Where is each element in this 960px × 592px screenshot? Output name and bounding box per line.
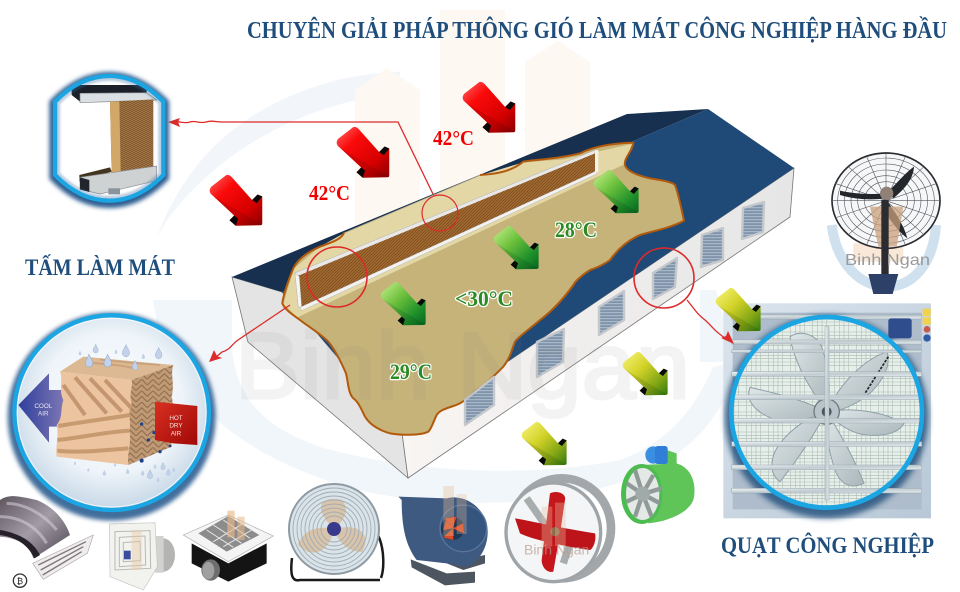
- louvered wall vents: [465, 202, 764, 425]
- pad airflow circle diagram: [8, 313, 216, 521]
- product: centrifugal blower: [398, 486, 488, 585]
- product: ceiling exhaust fan: [109, 523, 175, 590]
- yellow exhaust arrows: [522, 352, 668, 465]
- large industrial exhaust fan: [723, 303, 931, 518]
- product: floor fan: [289, 484, 383, 580]
- hot air block: DRY: [169, 423, 183, 430]
- hot air block: [155, 402, 197, 445]
- porthole: cooling pad on rail: [55, 73, 163, 203]
- left gable wall: [232, 277, 408, 478]
- cooling pad strip: [296, 153, 595, 307]
- inside temperature labels: [390, 217, 597, 384]
- yellow arrow on fan: [716, 288, 761, 331]
- roof back slope: [232, 109, 708, 292]
- hot air block: HOT: [169, 415, 183, 422]
- white top rail: [294, 150, 595, 277]
- corrugated pad block: [56, 357, 173, 465]
- product: flexible duct diffuser: ₿: [17, 576, 23, 586]
- water droplets: [74, 344, 175, 482]
- inside temperature labels: <30°C: [455, 286, 513, 311]
- product: flexible duct diffuser: [0, 496, 93, 587]
- wall mounted fan: [832, 153, 940, 294]
- outside temperature labels: 42°C: [433, 126, 474, 150]
- cutaway interior: [282, 143, 684, 435]
- label: industrial fan: QUẠT CÔNG NGHIỆP: [721, 532, 934, 558]
- hot air block: AIR: [171, 430, 182, 437]
- outside temperature labels: [309, 126, 474, 205]
- building: [232, 109, 794, 478]
- product: red axial fan: Binh Ngan: [524, 541, 589, 557]
- blob outline: [282, 143, 684, 435]
- cool air arrow: [18, 373, 65, 443]
- louver bars: [732, 315, 922, 500]
- interior floor blob: [282, 143, 684, 435]
- label: cooling pad: TẤM LÀM MÁT: [25, 254, 175, 280]
- product: green axial fan: [621, 446, 694, 524]
- lighter end wall: [283, 144, 632, 317]
- product: ceiling cassette fan: [183, 511, 273, 582]
- roof front slope: [282, 109, 794, 433]
- watermark lettering: Binh Ngan: [235, 313, 690, 418]
- inside temperature labels: 29°C: [390, 359, 432, 384]
- lower rail: [300, 171, 597, 311]
- green cool-air arrows: [381, 170, 639, 325]
- cool air arrow: COOL: [34, 403, 53, 410]
- outside temperature labels: 42°C: [309, 181, 350, 205]
- thin top wall edge: [345, 175, 480, 233]
- red heat arrows: [210, 82, 515, 226]
- cool air arrow: AIR: [38, 410, 49, 417]
- callout line to fan: [687, 300, 734, 344]
- watermark background: [153, 10, 740, 503]
- wall mounted fan: Binh Ngan: [845, 252, 930, 269]
- right side wall: [402, 168, 794, 478]
- callout lines and circles: [168, 118, 694, 362]
- product: red axial fan: [506, 478, 611, 582]
- inside temperature labels: 28°C: [555, 217, 597, 242]
- fan blades: [749, 333, 904, 486]
